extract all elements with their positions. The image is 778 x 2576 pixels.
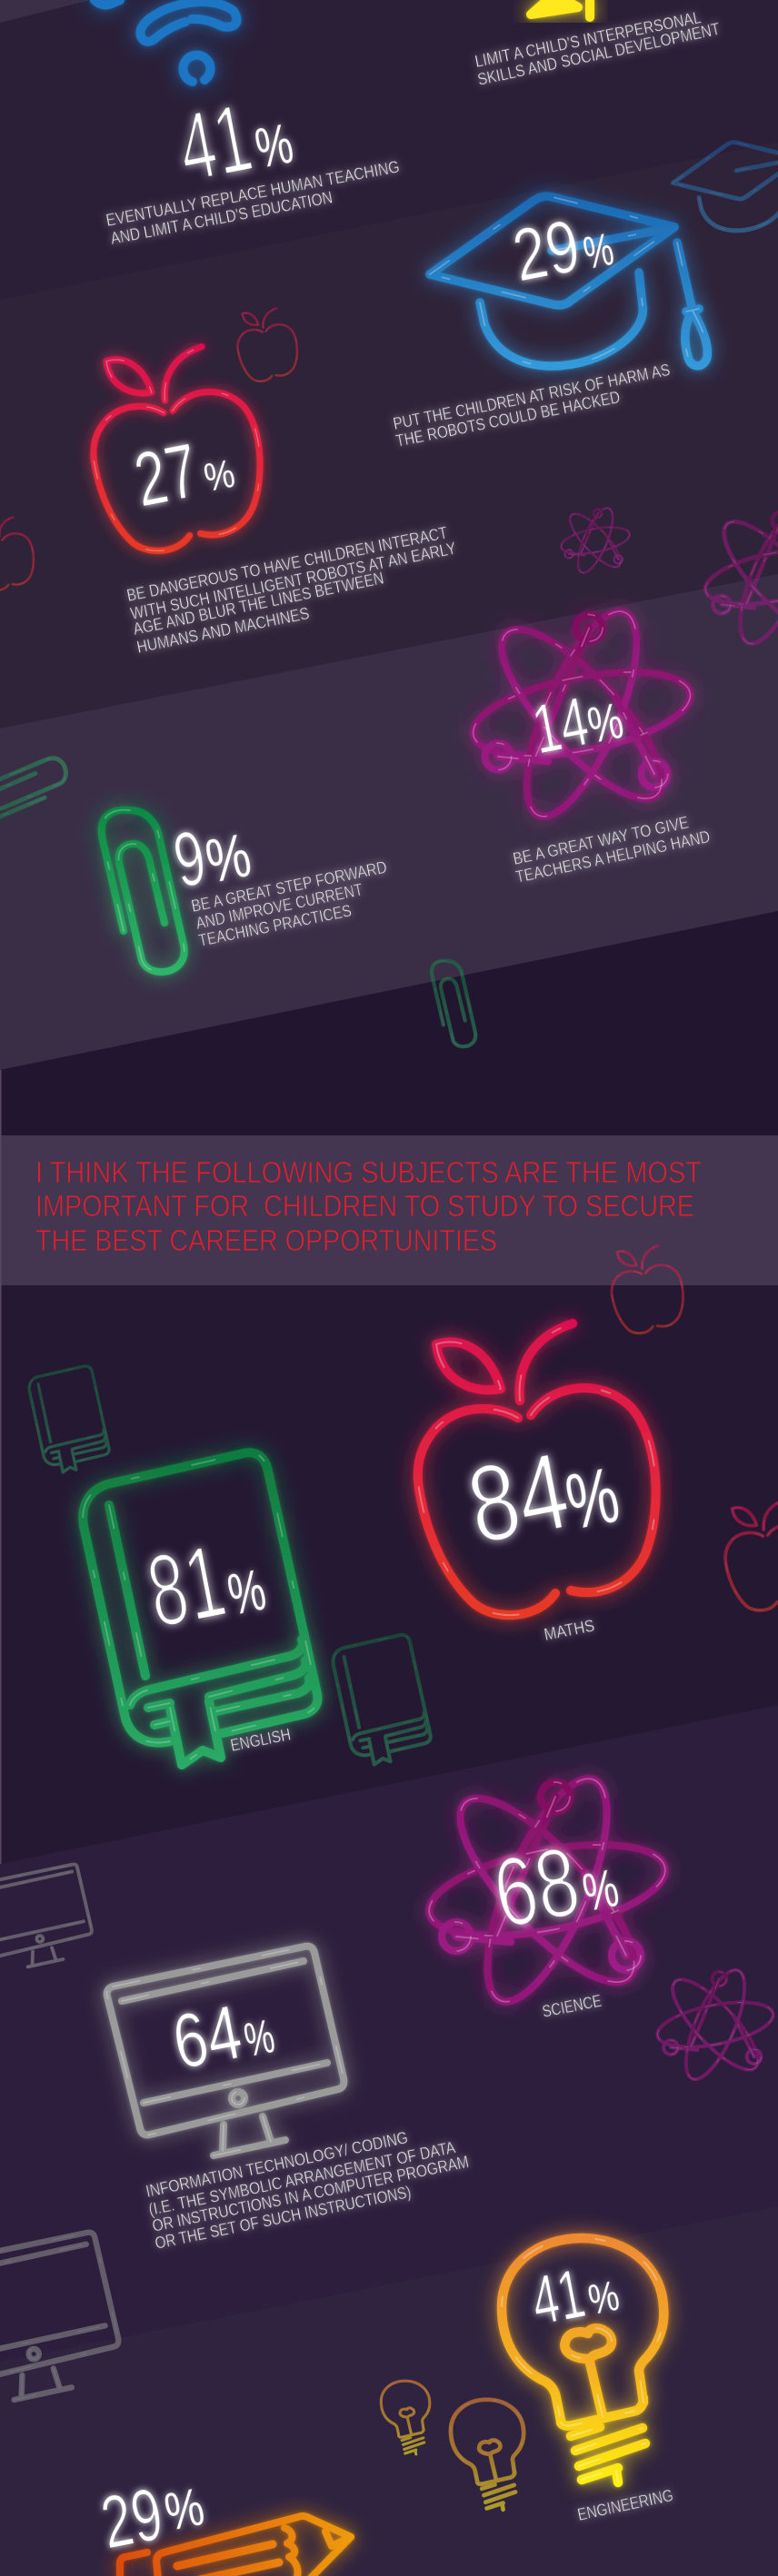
number: 29 percent bottom: % bbox=[160, 2477, 209, 2542]
text: 41 percent caption: AND LIMIT A CHILD'S EDUCATION bbox=[109, 188, 334, 248]
text: information technology caption: OR THE SET OF SUCH INSTRUCTIONS) bbox=[154, 2183, 413, 2253]
text: 9 percent caption: AND IMPROVE CURRENT bbox=[194, 880, 364, 933]
text: 29 percent caption: PUT THE CHILDREN AT RISK OF HARM AS bbox=[392, 361, 672, 433]
number: 9 percent: % bbox=[200, 820, 256, 897]
icon: IT monitor bbox=[107, 1947, 344, 2155]
icon: decorative atom right edge bbox=[701, 501, 778, 652]
text: information technology caption: OR INSTRUCTIONS IN A COMPUTER PROGRAM bbox=[151, 2153, 471, 2235]
number: 41 percent engineering: 41 bbox=[525, 2254, 591, 2341]
panel: band with 41 percent bbox=[0, 0, 778, 300]
icon: decorative apple right bbox=[725, 1501, 778, 1610]
icon: pencil bbox=[120, 2516, 351, 2576]
text: 27 percent caption: AGE AND BLUR THE LINES BETWEEN bbox=[132, 569, 385, 639]
number: 29 percent: 29 bbox=[506, 204, 586, 298]
icon: 14 percent atom bbox=[466, 598, 697, 830]
number: 41 percent: 41 bbox=[170, 84, 260, 203]
icon: 9 percent paperclip bbox=[102, 810, 185, 972]
icon: engineering bulb bbox=[502, 2238, 663, 2482]
icon: decorative bulb small bbox=[381, 2381, 430, 2454]
label: maths: MATHS bbox=[543, 1617, 596, 1644]
text: 27 percent caption bbox=[125, 524, 457, 657]
number: 68 percent: % bbox=[578, 1858, 623, 1923]
text: 41 percent caption bbox=[105, 157, 401, 248]
text: 27 percent caption: BE DANGEROUS TO HAVE CHILDREN INTERACT bbox=[125, 524, 449, 605]
text: 9 percent caption bbox=[190, 858, 388, 950]
text: information technology caption bbox=[145, 2128, 471, 2253]
icon: decorative graduation cap bbox=[673, 143, 778, 231]
number: 64 percent: % bbox=[240, 2010, 279, 2067]
icon: decorative monitor top bbox=[0, 1864, 92, 1967]
text: 27 percent caption: HUMANS AND MACHINES bbox=[135, 604, 311, 657]
icon: decorative paperclip bottom bbox=[432, 961, 475, 1046]
text: 14 percent caption: BE A GREAT WAY TO GIVE bbox=[512, 813, 691, 868]
number: 29 percent bottom: 29 bbox=[95, 2472, 169, 2565]
panel: band with 29 and 27 percent bbox=[0, 142, 778, 728]
text: 29 percent caption: THE ROBOTS COULD BE HACKED bbox=[394, 388, 622, 451]
text: 27 percent caption: WITH SUCH INTELLIGENT ROBOTS AT AN EARLY bbox=[129, 540, 457, 623]
icon: science atom bbox=[422, 1764, 673, 2016]
number: 64 percent: 64 bbox=[165, 1988, 248, 2086]
number: 14 percent: % bbox=[583, 691, 628, 754]
icon: yellow robot fragment bbox=[531, 0, 590, 17]
text: 41 percent caption: EVENTUALLY REPLACE HUMAN TEACHING bbox=[105, 157, 401, 230]
number: 81 percent: % bbox=[223, 1556, 271, 1628]
icon: decorative monitor bottom bbox=[0, 2233, 118, 2400]
number: 84 percent: % bbox=[559, 1451, 626, 1547]
number: 27 percent: % bbox=[201, 451, 238, 500]
icon: decorative atom bbox=[653, 1963, 777, 2086]
icon: wifi signal bbox=[95, 0, 237, 82]
text: social development caption: SKILLS AND SOCIAL DEVELOPMENT bbox=[476, 20, 722, 89]
heading: subjects statement bbox=[35, 1155, 702, 1257]
number: 41 percent engineering: % bbox=[584, 2271, 623, 2323]
number: 27 percent: 27 bbox=[127, 427, 204, 523]
number: 41 percent: % bbox=[251, 112, 298, 181]
icon: decorative apple left bbox=[0, 518, 34, 590]
panel: engineering and bottom band bbox=[0, 2206, 778, 2576]
panel: heading band bbox=[0, 1135, 778, 1285]
icon: decorative bulb medium bbox=[451, 2400, 524, 2510]
number: 9 percent bbox=[166, 814, 256, 904]
icon: decorative book bottom bbox=[334, 1635, 431, 1765]
icon: english book bbox=[83, 1452, 317, 1765]
heading: subjects statement: I THINK THE FOLLOWING SUBJECTS ARE THE MOST bbox=[35, 1155, 702, 1189]
icon: decorative apple bbox=[237, 309, 297, 381]
text: social development caption: LIMIT A CHILD'S INTERPERSONAL bbox=[474, 8, 703, 71]
panel: dark gap before subject heading bbox=[0, 911, 778, 1135]
panel: top corner band bbox=[0, 0, 91, 23]
text: 9 percent caption: TEACHING PRACTICES bbox=[197, 902, 353, 950]
panel: band with 9 and 14 percent bbox=[0, 574, 778, 1070]
icon: decorative book top bbox=[29, 1366, 109, 1472]
icon: 27 percent apple bbox=[94, 347, 260, 550]
text: 14 percent caption: TEACHERS A HELPING HAND bbox=[514, 827, 712, 887]
icon: maths apple bbox=[418, 1323, 656, 1615]
text: information technology caption: (I.E. THE SYMBOLIC ARRANGEMENT OF DATA bbox=[147, 2138, 457, 2219]
number: 84 percent: 84 bbox=[458, 1429, 578, 1568]
number: 29 percent: % bbox=[579, 223, 618, 279]
label: engineering: ENGINEERING bbox=[576, 2486, 674, 2524]
icon: decorative paperclip left bbox=[0, 757, 72, 824]
left edge line bbox=[0, 1070, 2, 1864]
icon: decorative apple over heading bbox=[612, 1245, 683, 1333]
label: english: ENGLISH bbox=[229, 1726, 293, 1755]
number: 9 percent: 9 bbox=[166, 814, 213, 904]
text: 9 percent caption: BE A GREAT STEP FORWARD bbox=[190, 858, 388, 916]
text: information technology caption: INFORMATION TECHNOLOGY/ CODING bbox=[145, 2128, 410, 2201]
icon: 29 percent graduation cap bbox=[430, 196, 707, 366]
panel: science and IT band bbox=[0, 1705, 778, 2362]
number: 14 percent: 14 bbox=[526, 683, 594, 769]
panel: english and maths band bbox=[0, 1285, 778, 1864]
heading: subjects statement: THE BEST CAREER OPPORTUNITIES bbox=[35, 1224, 497, 1257]
number: 68 percent: 68 bbox=[484, 1825, 588, 1949]
heading: subjects statement: IMPORTANT FOR CHILDREN TO STUDY TO SECURE bbox=[35, 1189, 694, 1223]
number: 81 percent: 81 bbox=[139, 1523, 234, 1650]
label: science: SCIENCE bbox=[541, 1992, 603, 2021]
icon: decorative atom small bbox=[559, 504, 632, 577]
